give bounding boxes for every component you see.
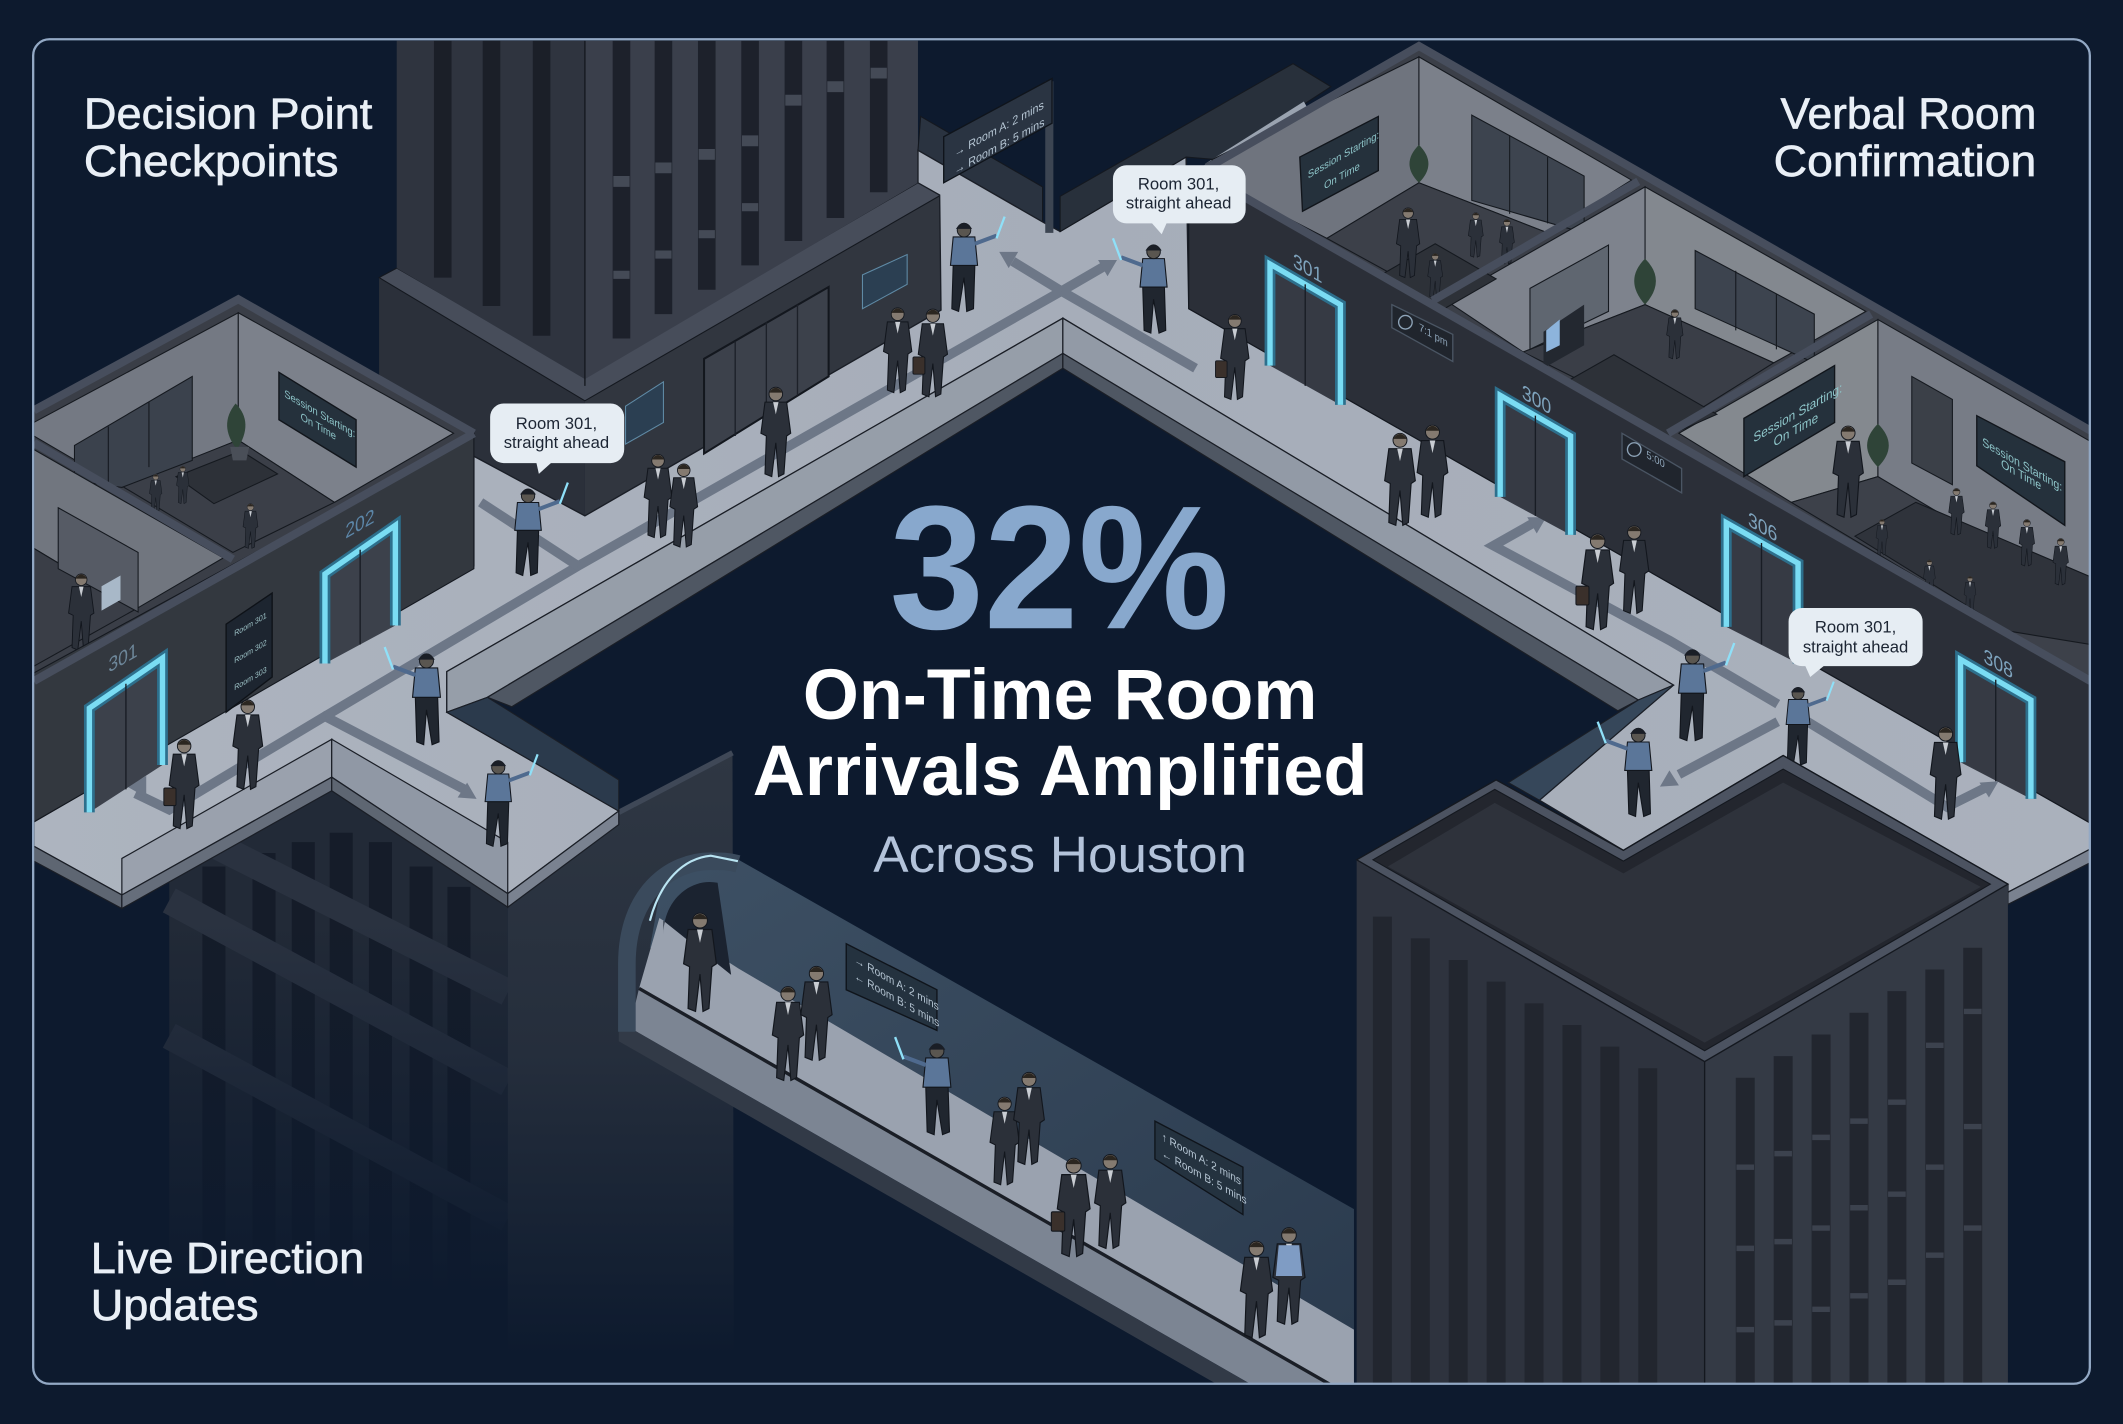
label: Decision Point Checkpoints: Checkpoints bbox=[84, 138, 338, 186]
right office screens: Session Starting: bbox=[1308, 129, 1379, 182]
label: Verbal Room Confirmation bbox=[1774, 91, 2036, 186]
tunnel bbox=[619, 856, 1354, 1395]
elevators right corridor: 300 bbox=[1522, 381, 1551, 420]
upper tower bbox=[397, 41, 918, 386]
tunnel direction signs: → Room A: 2 mins bbox=[854, 954, 939, 1014]
elevators right corridor: 306 bbox=[1748, 508, 1777, 547]
elevator bank on tower bbox=[704, 287, 829, 454]
elevator 301 left bbox=[89, 639, 162, 812]
heading: On-Time Room Arrivals Amplified: Arrivals Amplified bbox=[753, 731, 1367, 811]
subheading: Across Houston: Across Houston bbox=[873, 825, 1247, 883]
right office screens: Session Starting: bbox=[1982, 434, 2062, 494]
right tower bbox=[1357, 756, 2008, 1395]
back wall top bbox=[1060, 64, 1331, 232]
tunnel direction signs: ↑ Room A: 2 mins bbox=[1162, 1131, 1241, 1188]
left wall rims bbox=[34, 299, 474, 681]
speech bubble top: Room 301, bbox=[1138, 175, 1219, 194]
walkway edge bands bbox=[34, 318, 2091, 909]
directory sign left wall: Room 302 bbox=[234, 638, 267, 665]
right corridor wall bbox=[1189, 196, 2091, 823]
directory sign left wall bbox=[226, 593, 272, 712]
clock boards bbox=[1392, 305, 1682, 493]
glass railing right platform bbox=[1508, 685, 1673, 800]
right office screens: Session Starting: bbox=[1753, 380, 1842, 446]
back wall behind sign bbox=[918, 116, 1043, 223]
speech bubble right: straight ahead bbox=[1803, 638, 1908, 657]
wall information boards bbox=[626, 255, 907, 444]
right office occupants and plants bbox=[1396, 145, 2068, 612]
label: Decision Point Checkpoints bbox=[84, 91, 372, 186]
tunnel direction signs: ← Room B: 5 mins bbox=[1162, 1147, 1247, 1208]
hanging direction sign: → Room A: 2 mins bbox=[955, 97, 1044, 160]
right wall rims bbox=[1205, 46, 2091, 681]
label: Live Direction Updates: Updates bbox=[91, 1282, 259, 1330]
floor direction arrows bbox=[127, 252, 1998, 810]
heading: On-Time Room Arrivals Amplified: On-Time Room bbox=[803, 655, 1317, 735]
left office screen bbox=[279, 372, 356, 467]
label: Live Direction Updates bbox=[91, 1235, 364, 1330]
tunnel direction signs bbox=[846, 944, 1247, 1215]
label: Decision Point Checkpoints: Decision Point bbox=[84, 91, 372, 139]
upper tower base bbox=[379, 183, 941, 517]
clock boards: 5:00 bbox=[1646, 449, 1665, 471]
guards with tablets bbox=[385, 217, 1834, 846]
elevator 301 left: 301 bbox=[108, 639, 138, 678]
label: Live Direction Updates: Live Direction bbox=[91, 1235, 364, 1283]
speech bubble left: Room 301, bbox=[516, 414, 597, 433]
speech bubble right: Room 301, bbox=[1815, 617, 1896, 636]
hanging direction sign bbox=[944, 79, 1052, 233]
directory sign left wall: Room 301 bbox=[234, 610, 267, 638]
heading: On-Time Room Arrivals Amplified bbox=[753, 655, 1367, 811]
speech bubble right bbox=[1789, 608, 1923, 677]
elevator 202 bbox=[325, 505, 395, 663]
glass railing left platform bbox=[447, 697, 619, 811]
connector column bbox=[508, 756, 734, 1254]
speech bubble left bbox=[490, 403, 624, 474]
speech bubble top: straight ahead bbox=[1126, 194, 1231, 213]
lower left building fading out bbox=[163, 792, 508, 1190]
office 202 walls and floor bbox=[34, 313, 454, 666]
left office occupants bbox=[69, 403, 258, 650]
right offices base bbox=[1205, 50, 2089, 558]
right office screens: On Time bbox=[1774, 409, 1818, 450]
label: Verbal Room Confirmation: Verbal Room bbox=[1780, 91, 2036, 139]
elevator 202: 202 bbox=[345, 505, 375, 544]
people in tunnel bbox=[684, 913, 1305, 1338]
left office screen: On Time bbox=[301, 411, 336, 443]
right office screens bbox=[1300, 116, 2065, 525]
speech bubble top bbox=[1113, 165, 1246, 234]
people on walkway bbox=[164, 308, 1961, 829]
speech bubble left: straight ahead bbox=[504, 433, 609, 452]
right office screens: On Time bbox=[1324, 160, 1360, 193]
left offices base bbox=[34, 299, 474, 681]
office row right walls and floors bbox=[1212, 57, 2091, 681]
left corridor wall bbox=[34, 433, 474, 822]
label: Verbal Room Confirmation: Confirmation bbox=[1774, 138, 2036, 186]
heading: 32%: 32% bbox=[890, 470, 1229, 666]
elevators right corridor: 308 bbox=[1984, 645, 2013, 684]
elevators right corridor bbox=[1270, 250, 2031, 799]
right office screens: On Time bbox=[2001, 456, 2041, 493]
tunnel direction signs: ← Room B: 5 mins bbox=[854, 970, 939, 1030]
directory sign left wall: Room 303 bbox=[234, 665, 267, 693]
clock boards: 7:1 pm bbox=[1419, 321, 1448, 350]
elevators right corridor: 301 bbox=[1293, 250, 1322, 289]
left office screen: Session Starting: bbox=[284, 388, 355, 441]
walkway floor bbox=[34, 150, 2091, 895]
hanging direction sign: → Room B: 5 mins bbox=[955, 115, 1044, 178]
